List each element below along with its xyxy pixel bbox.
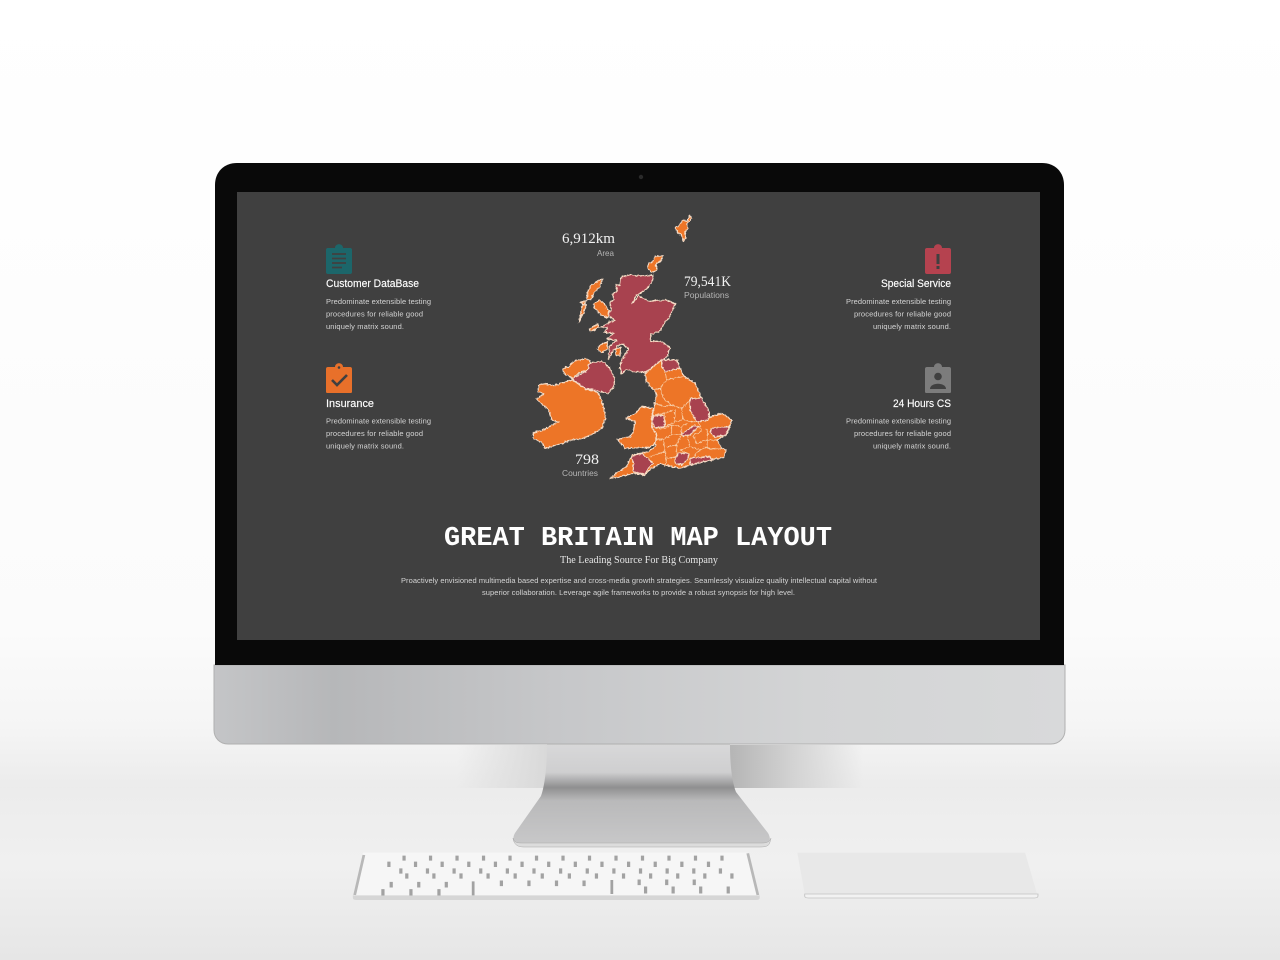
description paragraph: superior collaboration. Leverage agile frameworks to provide a robust synopsis for high level. [482, 588, 795, 597]
icon: grey clipboard with person [925, 363, 951, 393]
stat: area: 6,912km [562, 231, 615, 247]
camera [639, 175, 643, 179]
panel: customer database [326, 244, 431, 331]
title: GREAT BRITAIN MAP LAYOUT [444, 524, 832, 554]
description: procedures for reliable good [854, 310, 951, 318]
stat: countries: Countries [562, 468, 598, 478]
description [326, 416, 431, 450]
description: uniquely matrix sound. [873, 442, 951, 450]
stat: countries [562, 452, 599, 478]
description: Predominate extensible testing [846, 416, 951, 426]
icon: orange clipboard with check [326, 363, 352, 393]
description: procedures for reliable good [326, 429, 423, 438]
description [326, 297, 431, 331]
description: Predominate extensible testing [326, 297, 431, 306]
monitor chin [214, 665, 1065, 744]
monitor bezel [215, 163, 1064, 665]
panel: special service [846, 244, 951, 331]
stat: populations: Populations [684, 290, 729, 300]
description: procedures for reliable good [854, 429, 951, 438]
map of Great Britain and Ireland [533, 215, 732, 478]
heading: 24 Hours CS [893, 398, 951, 410]
trackpad [797, 853, 1038, 898]
description: Predominate extensible testing [846, 297, 951, 306]
panel: insurance [326, 363, 431, 450]
subtitle: The Leading Source For Big Company [560, 555, 719, 566]
description: uniquely matrix sound. [326, 322, 404, 331]
heading: Special Service [881, 278, 951, 290]
description paragraph [401, 576, 878, 597]
description paragraph: Proactively envisioned multimedia based expertise and cross-media growth strategies. Seamlessly visualize quality intellectual capital without [401, 576, 878, 585]
description: procedures for reliable good [326, 310, 423, 318]
panel: 24 hours cs [846, 363, 951, 450]
stat: populations [684, 274, 731, 300]
monitor stand [513, 744, 771, 847]
description: uniquely matrix sound. [873, 322, 951, 331]
stat: populations: 79,541K [684, 274, 731, 290]
heading: Insurance [326, 398, 374, 410]
icon: teal clipboard [326, 244, 352, 274]
description: uniquely matrix sound. [326, 442, 404, 450]
keyboard [353, 853, 760, 900]
screen [237, 192, 1040, 640]
heading: Customer DataBase [326, 278, 419, 290]
description: Predominate extensible testing [326, 416, 431, 426]
icon: red clipboard with exclamation [925, 244, 951, 274]
description [846, 297, 951, 331]
stat: area [562, 231, 615, 258]
stat: area: Area [597, 248, 614, 258]
description [846, 416, 951, 450]
stat: countries: 798 [575, 452, 599, 468]
